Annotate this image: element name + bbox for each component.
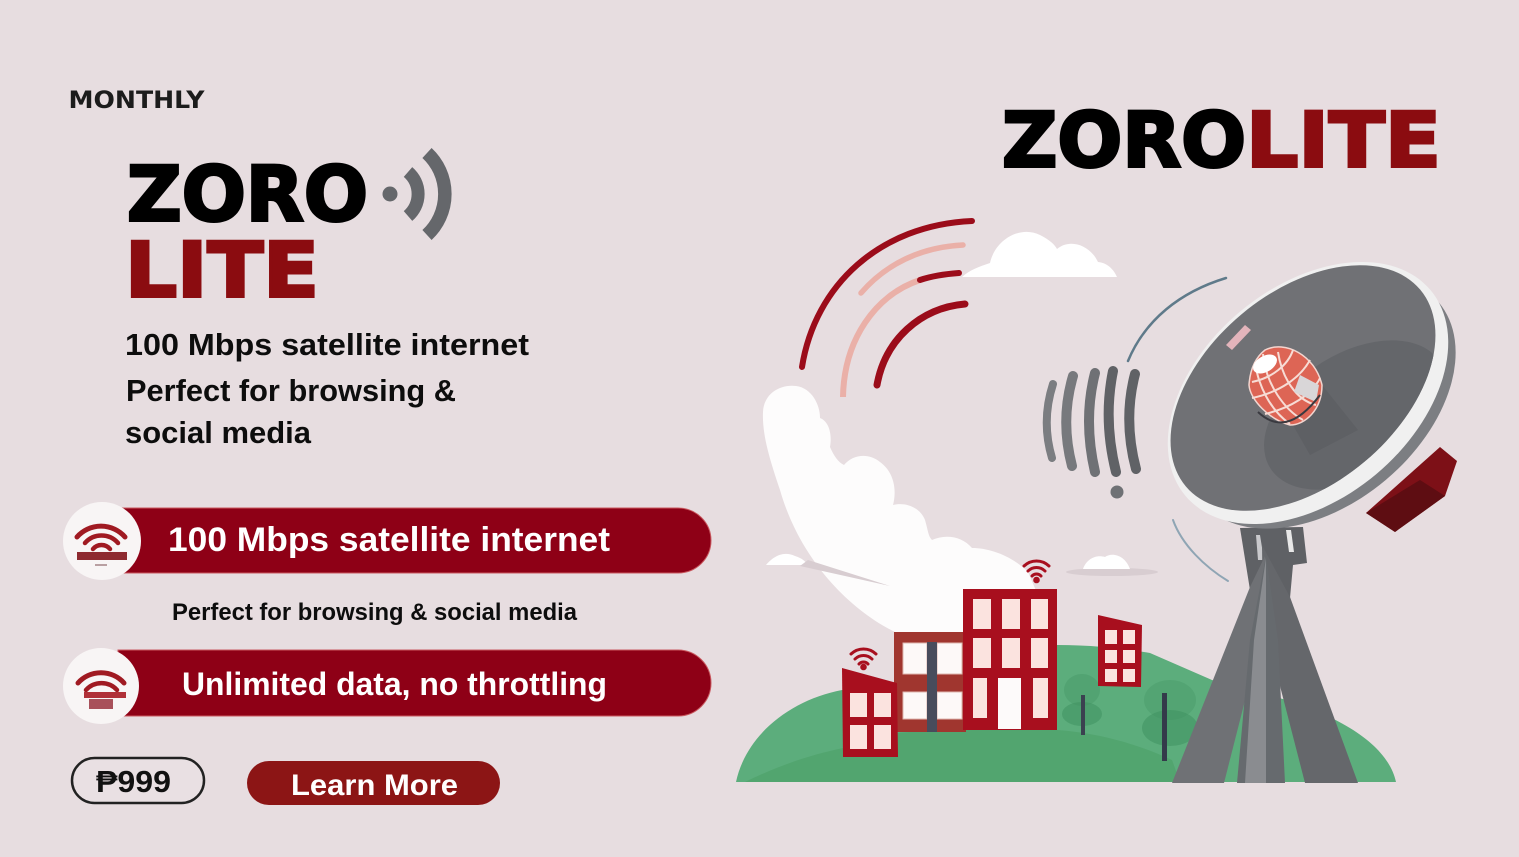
text block: plan description: Perfect for browsing & (126, 373, 456, 408)
signal arcs: grey (1047, 278, 1228, 581)
feature bar: 100 Mbps (63, 502, 711, 580)
dish logo mark (1226, 325, 1251, 350)
feature bar: unlimited data: Unlimited data, no throttling (182, 666, 607, 702)
brand title: ZORO (1002, 96, 1246, 184)
label: monthly: MONTHLY (68, 86, 205, 114)
text block: plan description: 100 Mbps satellite internet (125, 327, 529, 362)
red feed box (1366, 447, 1457, 532)
dish (1168, 262, 1456, 528)
plane streak (800, 560, 890, 586)
icon: wifi badge (77, 526, 127, 566)
text block: plan description (125, 327, 529, 450)
price pill (72, 758, 204, 803)
feature bar: unlimited data (63, 648, 711, 724)
building: left (842, 668, 898, 757)
dish feed dome (1249, 347, 1358, 455)
logo word: LITE: LITE (125, 226, 319, 314)
feature bar: 100 Mbps: 100 Mbps satellite internet (168, 521, 610, 559)
text block: plan description: social media (125, 415, 312, 450)
wifi icons on buildings (851, 561, 1049, 669)
dish inner shadow (1264, 340, 1434, 490)
building: right (1098, 615, 1142, 687)
building: tall (963, 589, 1057, 730)
logo word: ZORO: ZORO (127, 150, 368, 238)
button: learn more: Learn More (291, 769, 458, 802)
tower (1172, 527, 1358, 783)
button: learn more (247, 761, 500, 805)
hills (736, 645, 1396, 782)
big cloud (763, 386, 1040, 632)
icon: wifi badge (78, 673, 126, 709)
trees (1062, 674, 1198, 761)
signal arcs: red (802, 221, 972, 397)
brand title: LITE (1246, 96, 1441, 184)
text: browsing note: Perfect for browsing & social media (172, 599, 578, 626)
price pill: ₱999 (96, 764, 171, 799)
small cloud top (962, 232, 1117, 277)
small clouds low (766, 554, 808, 565)
building: middle (894, 632, 966, 732)
illustration: satellite scene (736, 209, 1504, 783)
logo: Zoro Lite with signal icon (125, 150, 445, 314)
brand title (1002, 96, 1441, 184)
icon: signal waves (382, 153, 445, 235)
